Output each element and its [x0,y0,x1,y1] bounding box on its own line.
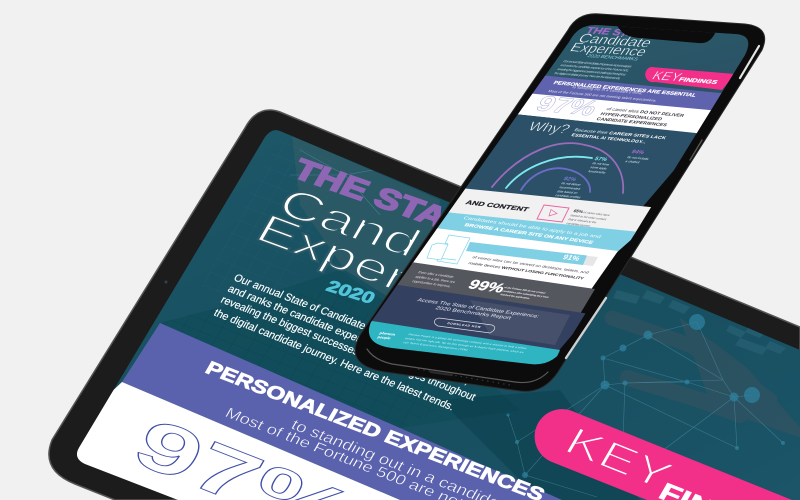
phone key findings pill [645,67,735,90]
header title: 2020 BENCHMARKS [586,54,640,62]
hand [612,318,780,420]
white devices band: of career sites can be viewed on desktops, tablets, and [471,255,590,274]
white stat band: CANDIDATE EXPERIENCES [595,117,668,128]
download button [434,318,495,333]
phone screen [368,25,748,364]
footer text: Phenom People is a global HR technology company with a mission to help a billion [407,333,528,350]
network nodes [506,314,785,478]
chart labels: some apply [589,166,608,170]
navy download band [370,284,586,350]
footer text: call Talent Experience Management (TXM). [402,341,470,352]
chart labels: a chatbot [624,160,641,164]
purple band: PERSONALIZED EXPERIENCES ARE ESSENTIAL [552,81,698,98]
notch [618,26,716,44]
header background [521,25,748,110]
footer logo: phenom [378,331,397,337]
gray improvement band: of the Fortune 500 do not contact [503,286,547,295]
and content band [448,188,652,236]
pink key findings pill [535,409,800,500]
chart labels: 94% [630,150,646,156]
why panel: Why? [525,119,573,137]
chart labels: do not have [591,162,611,166]
intro paragraph: Our annual State of Candidate Experience report analyzes [232,273,488,378]
gray improvement band: applies to a job, there are [414,275,456,284]
gray improvement band: Even after a candidate [417,271,455,279]
icon: devices [427,235,470,264]
footer text: people find the right job. We do this through an AI-based SaaS platform, which we [404,337,525,354]
network lines [290,150,783,497]
light blue band [436,212,636,252]
chart labels [554,150,650,199]
header title: Candidate [575,31,655,51]
white devices band [405,227,618,291]
tablet camera [164,280,168,284]
header paragraph: and ranks the candidate experience of the Fortune 500, [559,64,630,72]
heading: experience: Experience [248,206,551,350]
purple band: to standing out in a candidate's mind. [571,86,644,95]
footer logo: people [376,335,393,340]
gray improvement band: opportunities to improve. [411,280,452,288]
and content band: 65% [572,209,584,214]
speaker [654,26,674,28]
download button: DOWNLOAD NOW [446,322,482,329]
footer logo [376,332,396,340]
white devices band: mobile devices WITHOUT LOSING FUNCTIONALITY [467,261,586,280]
light blue band: Candidates should be able to apply to a job and [462,216,603,240]
why panel: ESSENTIAL AI TECHNOLOGY... [570,133,647,144]
device compatibility bar [466,242,598,266]
background photo shapes [160,135,786,500]
white stat band: 97% [531,92,603,121]
and content band: AND CONTENT [464,200,531,213]
purple band: Most of the Fortune 500 are not [222,405,467,500]
chart labels: do not deliver [560,182,583,187]
purple band [532,76,722,112]
phone key findings pill: FINDINGS [677,77,720,86]
intro paragraph: revealing the biggest successes and challenges throughout [219,295,478,403]
chart labels: 57% [593,157,609,163]
light blue band: BROWSE A CAREER SITE ON ANY DEVICE [463,223,595,246]
chart labels: candidate profiles [554,194,582,199]
gray improvement band [390,262,595,314]
icon: video [537,205,569,222]
tablet screen [60,110,800,500]
header paragraph: Our annual State of Candidate Experience report analyzes [562,60,633,68]
chart labels: 92% [562,177,578,183]
tablet body [49,110,800,500]
chart labels: recommended [558,186,581,191]
purple band: Most of the Fortune 500 are not meeting talent expectations. [547,90,658,103]
speaker holes and port [418,369,510,385]
heading: the state of: THE STATE OF [288,153,555,269]
teal footer [368,321,560,364]
header title [570,26,650,60]
gray improvement band: finished the application. [499,293,532,300]
chart labels: functionality [587,170,607,174]
concentric arc chart [492,143,623,193]
keyboard keys [613,290,786,355]
and content band: started to list video content [569,214,607,221]
phone key findings pill: KEY [649,68,686,84]
navy download band: Access The State of Candidate Experience: [416,298,541,320]
purple band: PERSONALIZED EXPERIENCES [202,358,548,500]
intro paragraph: the digital candidate journey. Here are the latest trends. [212,308,456,413]
chart labels: jobs based on [555,189,579,195]
white stat band [518,94,711,134]
why panel: Because their CAREER SITES LACK [573,128,668,140]
gray improvement band: 99% [465,277,508,296]
screen background [60,110,800,500]
phone device [340,10,770,391]
navy download band: 2020 Benchmarks Report [434,306,513,321]
header paragraph: the digital candidate journey. Here are the latest trends. [553,72,622,80]
why panel [465,114,697,206]
white stat band: HYPER-PERSONALIZED [599,112,664,122]
device compatibility bar: 91% [561,253,582,263]
and content band: that is relevant to the [567,218,598,224]
header title: Experience [567,40,650,60]
pink key findings pill: KEY [558,418,680,497]
heading: 2020 benchmarks: 2020 [323,277,379,307]
and content band: of career sites have [582,211,611,217]
chart labels: do not include [626,156,650,161]
white stat band: of career sites DO NOT DELIVER [605,107,686,119]
heading: candidate: Candidate [270,180,552,308]
phone body [355,14,765,391]
header paragraph [553,60,633,80]
gray improvement band: candidates after submitting they have [501,289,551,299]
tablet device [49,110,800,500]
intro paragraph: and ranks the candidate experience of the Fortune 500, [226,284,471,387]
and content band: candidate journey [565,222,592,228]
phone edge highlights [367,46,759,383]
header title: THE STATE OF [583,26,672,41]
purple band [122,323,562,500]
white stat panel [60,382,400,500]
header paragraph: revealing the biggest successes and challenges throughout [556,68,627,76]
